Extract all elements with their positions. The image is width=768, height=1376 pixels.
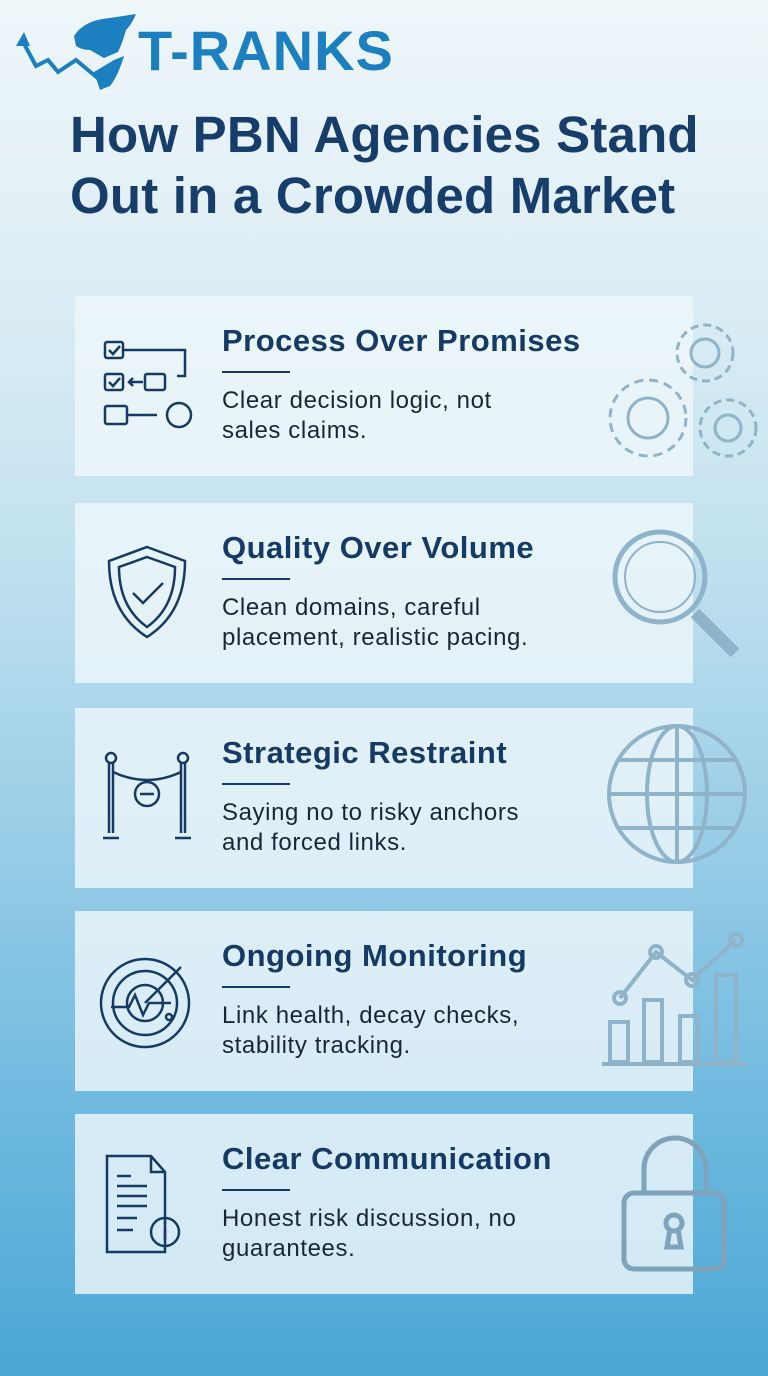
- icon: flowchart: [104, 340, 192, 428]
- icon: gears: [608, 324, 758, 458]
- panel: restraint: [75, 708, 693, 888]
- heading: Clear Communication: [222, 1141, 552, 1176]
- logo: T-RANKS: [138, 19, 394, 82]
- text: Saying no to risky anchors and forced links.: [222, 799, 519, 856]
- panel: communication: [75, 1114, 693, 1294]
- title: Out in a Crowded Market: [70, 167, 675, 224]
- icon: magnifier: [612, 530, 740, 658]
- title: How PBN Agencies Stand: [70, 106, 699, 163]
- text: Clear decision logic, not: [222, 387, 492, 414]
- text: Honest risk discussion, no guarantees.: [222, 1205, 516, 1262]
- heading: Quality Over Volume: [222, 530, 534, 565]
- icon: radar: [100, 958, 190, 1048]
- heading: Process Over Promises: [222, 323, 581, 358]
- text: sales claims.: [222, 417, 367, 444]
- panel: monitoring: [75, 911, 693, 1091]
- icon: globe: [607, 724, 747, 864]
- text: Clean domains, careful placement, realistic pacing.: [222, 594, 528, 651]
- icon: stanchion: [103, 752, 191, 840]
- icon: shield: [108, 546, 186, 638]
- panel: process: [75, 296, 693, 476]
- heading: Strategic Restraint: [222, 735, 507, 770]
- heading: Ongoing Monitoring: [222, 938, 527, 973]
- icon: document: [106, 1154, 180, 1254]
- logo: [16, 14, 394, 90]
- panel: quality: [75, 503, 693, 683]
- icon: chart: [602, 932, 748, 1066]
- text: [222, 387, 492, 444]
- icon: lock: [622, 1136, 726, 1272]
- text: Link health, decay checks, stability tracking.: [222, 1002, 519, 1059]
- title: [70, 106, 699, 224]
- icon: dino arrow: [16, 14, 136, 90]
